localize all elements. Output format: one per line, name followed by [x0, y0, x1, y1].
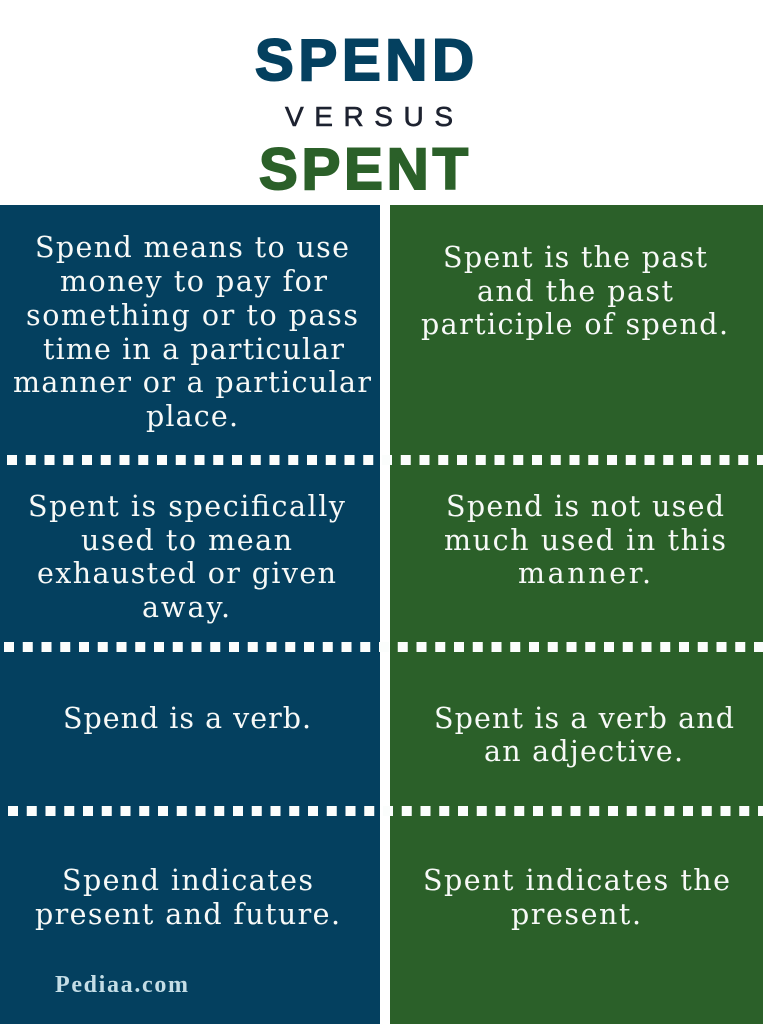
panel: spend column background — [0, 205, 380, 1024]
text: spend usage: Spend is not used — [446, 490, 724, 523]
text: spend usage: much used in this — [444, 524, 726, 557]
text: spend usage — [444, 490, 726, 590]
text: spent usage: used to mean — [81, 524, 292, 557]
text: spend definition: manner or a particular — [13, 366, 371, 399]
title: SPENT: SPENT — [259, 137, 468, 202]
text: spent definition: Spent is the past — [443, 241, 708, 274]
text: spend definition: something or to pass — [26, 299, 358, 332]
text: spent definition: participle of spend. — [421, 308, 728, 341]
text: spent usage: away. — [142, 591, 230, 624]
text: spend definition: place. — [146, 400, 238, 433]
text: spent tense: present. — [511, 898, 641, 931]
text: spent usage — [28, 490, 346, 624]
dotted separator: row 1 — [7, 455, 763, 465]
text: spent definition: and the past — [477, 275, 674, 308]
text: spend usage: manner. — [518, 557, 651, 590]
text: spent part of speech — [434, 702, 734, 768]
text: spend tense: Spend indicates — [62, 864, 313, 897]
text: spent usage: Spent is specifically — [28, 490, 346, 523]
text: spent usage: exhausted or given — [37, 557, 336, 590]
text: spent tense — [423, 864, 730, 931]
panel: spent column background — [390, 205, 763, 1024]
text: spend definition — [13, 231, 371, 433]
text: spend definition: money to pay for — [60, 265, 327, 298]
text: spent tense: Spent indicates the — [423, 864, 730, 897]
text: spend definition: time in a particular — [43, 333, 344, 366]
dotted separator: row 2 — [4, 642, 763, 652]
logo: Pediaa.com: Pediaa.com — [55, 972, 188, 998]
text: spend tense: present and future. — [35, 898, 340, 931]
text: spent part of speech: an adjective. — [484, 735, 683, 768]
text: spent definition — [421, 241, 728, 341]
text: spend tense — [35, 864, 340, 931]
text: spend definition: Spend means to use — [35, 231, 349, 264]
title: VERSUS: VERSUS — [285, 101, 453, 132]
text: spent part of speech: Spent is a verb and — [434, 702, 734, 735]
text: spend part of speech: Spend is a verb. — [63, 702, 311, 735]
title block — [255, 28, 474, 202]
dotted separator: row 3 — [8, 806, 763, 816]
title: SPEND: SPEND — [255, 28, 474, 93]
